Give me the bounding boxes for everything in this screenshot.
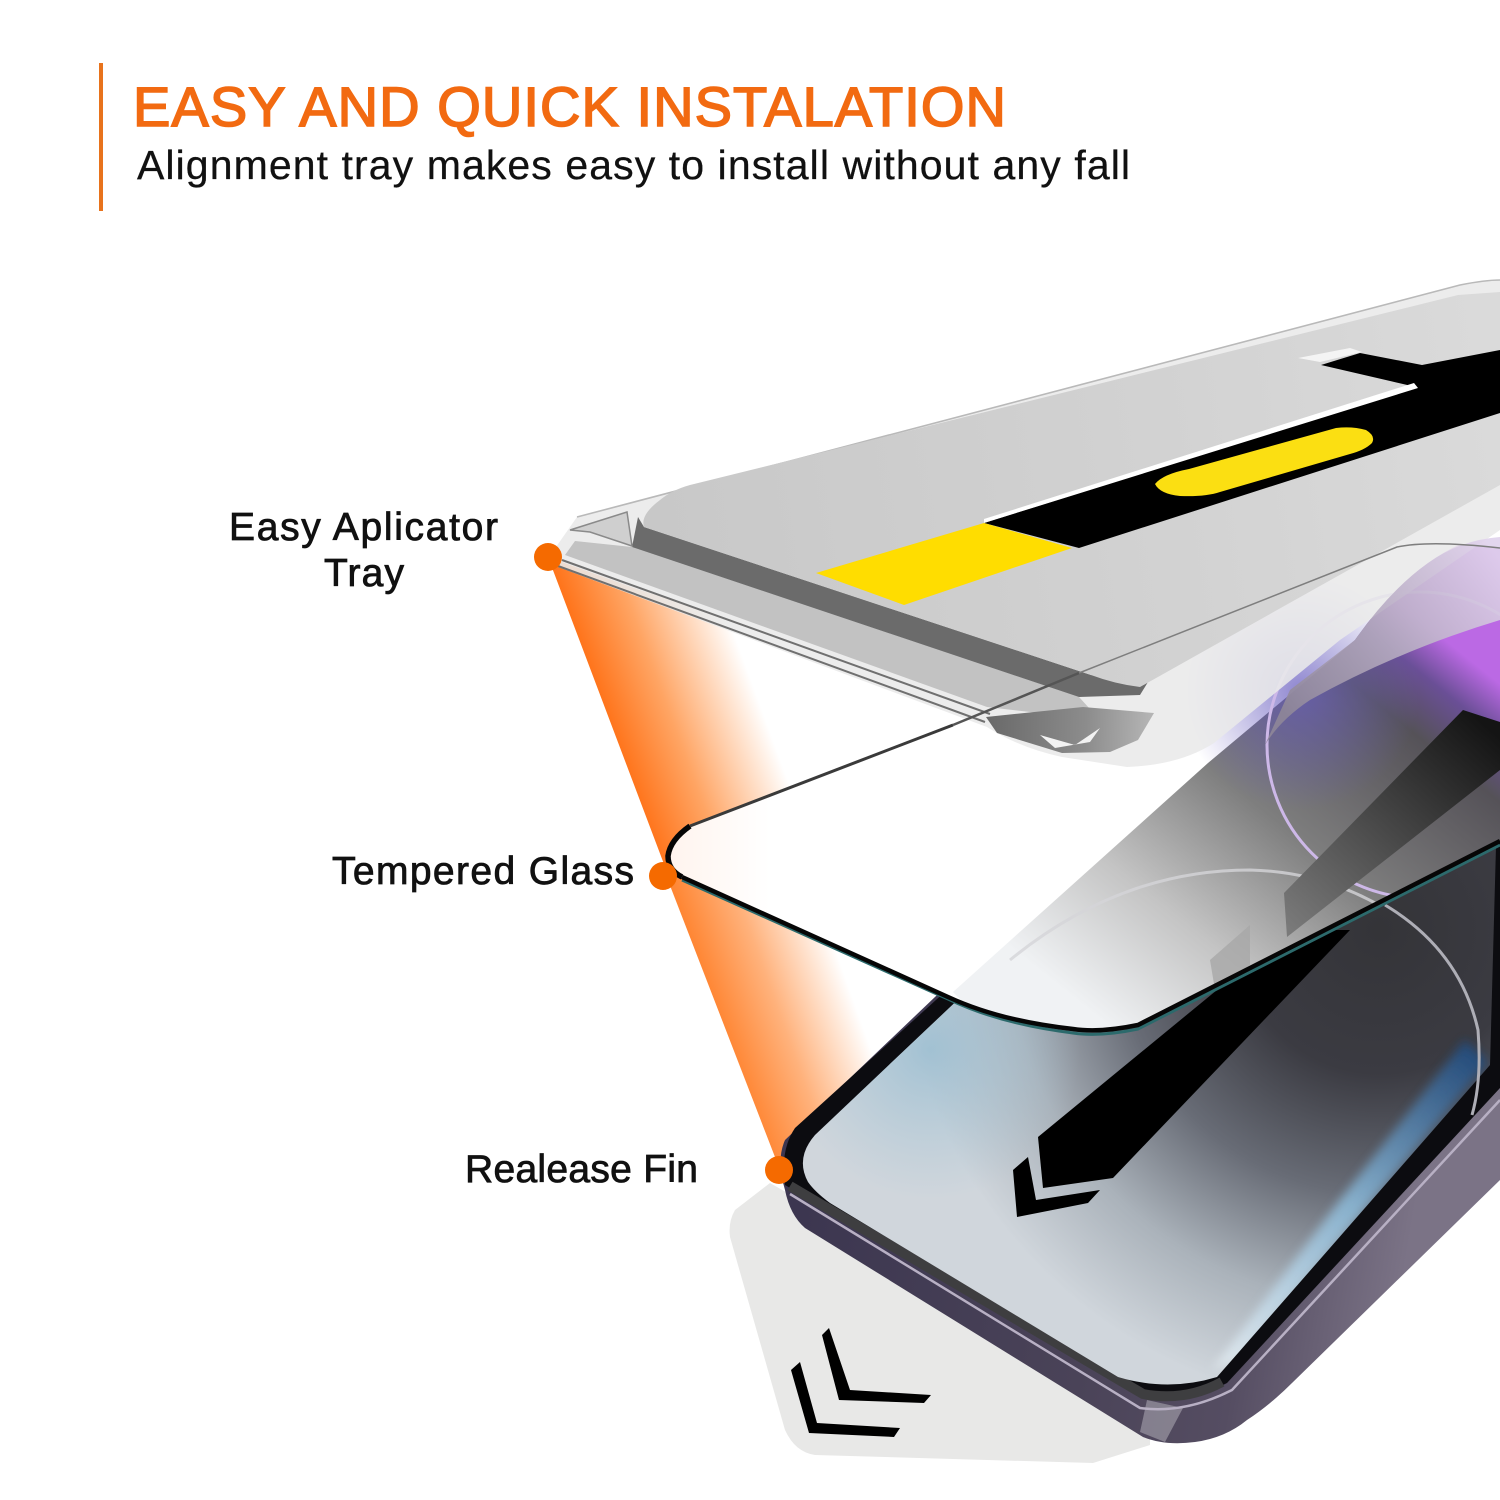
tray corner detail bbox=[570, 512, 632, 546]
label: easy aplicator tray bbox=[229, 506, 498, 595]
glass shaded area bbox=[953, 530, 1500, 1040]
tray dark inner wall bbox=[632, 517, 1148, 697]
tempered glass outline bbox=[668, 544, 1500, 1034]
phone frame bbox=[780, 700, 1500, 1443]
icon: fin chevrons bbox=[791, 1328, 931, 1437]
label: realease fin: Realease Fin bbox=[465, 1148, 698, 1191]
screen bezel bbox=[784, 700, 1500, 1399]
tray shell bbox=[549, 280, 1500, 767]
accent bar bbox=[99, 63, 103, 211]
label: easy aplicator tray: Tray bbox=[324, 552, 404, 595]
orange connector funnel bbox=[548, 557, 900, 1170]
yellow pill bbox=[1155, 427, 1373, 496]
film over tray bbox=[1265, 537, 1500, 745]
phone bbox=[780, 844, 1500, 1444]
release fin bbox=[730, 1183, 1150, 1463]
wallpaper ring bbox=[1385, 905, 1479, 1115]
subtitle: Alignment tray makes easy to install without any fall bbox=[137, 142, 1130, 188]
label: easy aplicator tray: Easy Aplicator bbox=[229, 506, 498, 549]
tray hinge detail bbox=[986, 707, 1154, 753]
marker: tray bbox=[534, 543, 562, 571]
title: EASY AND QUICK INSTALATION bbox=[133, 75, 1006, 138]
alignment strip bbox=[1038, 930, 1350, 1188]
black tab strip bbox=[984, 350, 1500, 548]
tempered glass body bbox=[668, 530, 1500, 1040]
screen bbox=[802, 848, 1496, 1384]
icon: screen chevron bbox=[1013, 1157, 1100, 1217]
label: tempered glass: Tempered Glass bbox=[332, 850, 634, 893]
ghosted strip bbox=[1284, 710, 1500, 937]
screen reflection bbox=[1212, 1040, 1488, 1370]
yellow pull sticker bbox=[816, 523, 1072, 605]
tray panel bbox=[643, 292, 1500, 687]
marker: fin bbox=[765, 1156, 793, 1184]
marker: glass bbox=[649, 862, 677, 890]
wallpaper ring lower bbox=[1010, 870, 1395, 960]
tray lower lip bbox=[565, 541, 1100, 720]
wallpaper ring top bbox=[1266, 690, 1392, 896]
applicator tray bbox=[549, 280, 1500, 767]
